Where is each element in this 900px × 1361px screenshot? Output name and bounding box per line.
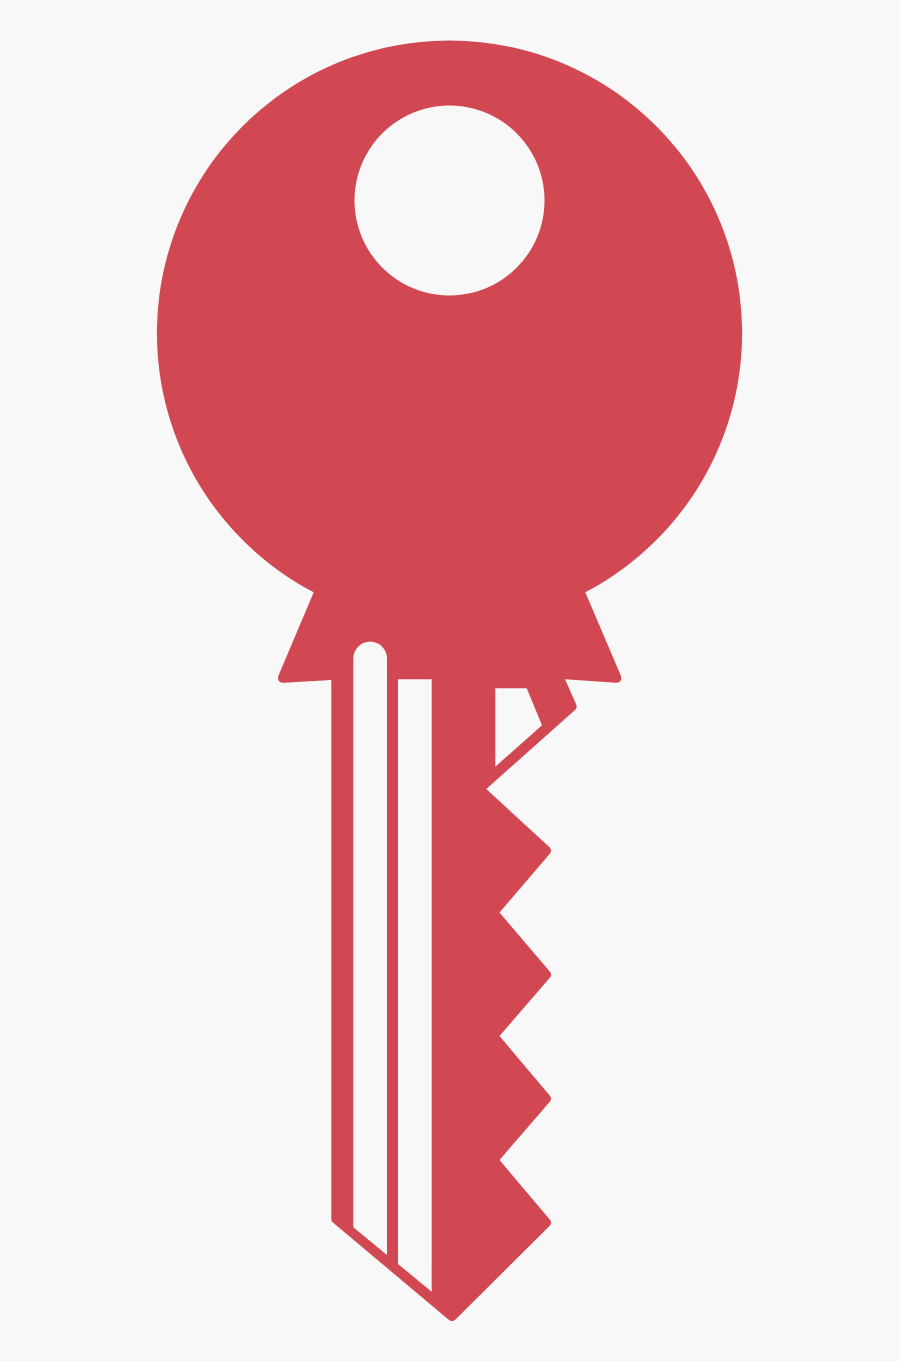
left slot xyxy=(353,642,387,1255)
key hole xyxy=(354,106,544,296)
middle slot xyxy=(398,679,432,1292)
small triangular window xyxy=(495,688,542,767)
key silhouette xyxy=(157,41,742,1321)
icon: red key xyxy=(157,41,742,1321)
